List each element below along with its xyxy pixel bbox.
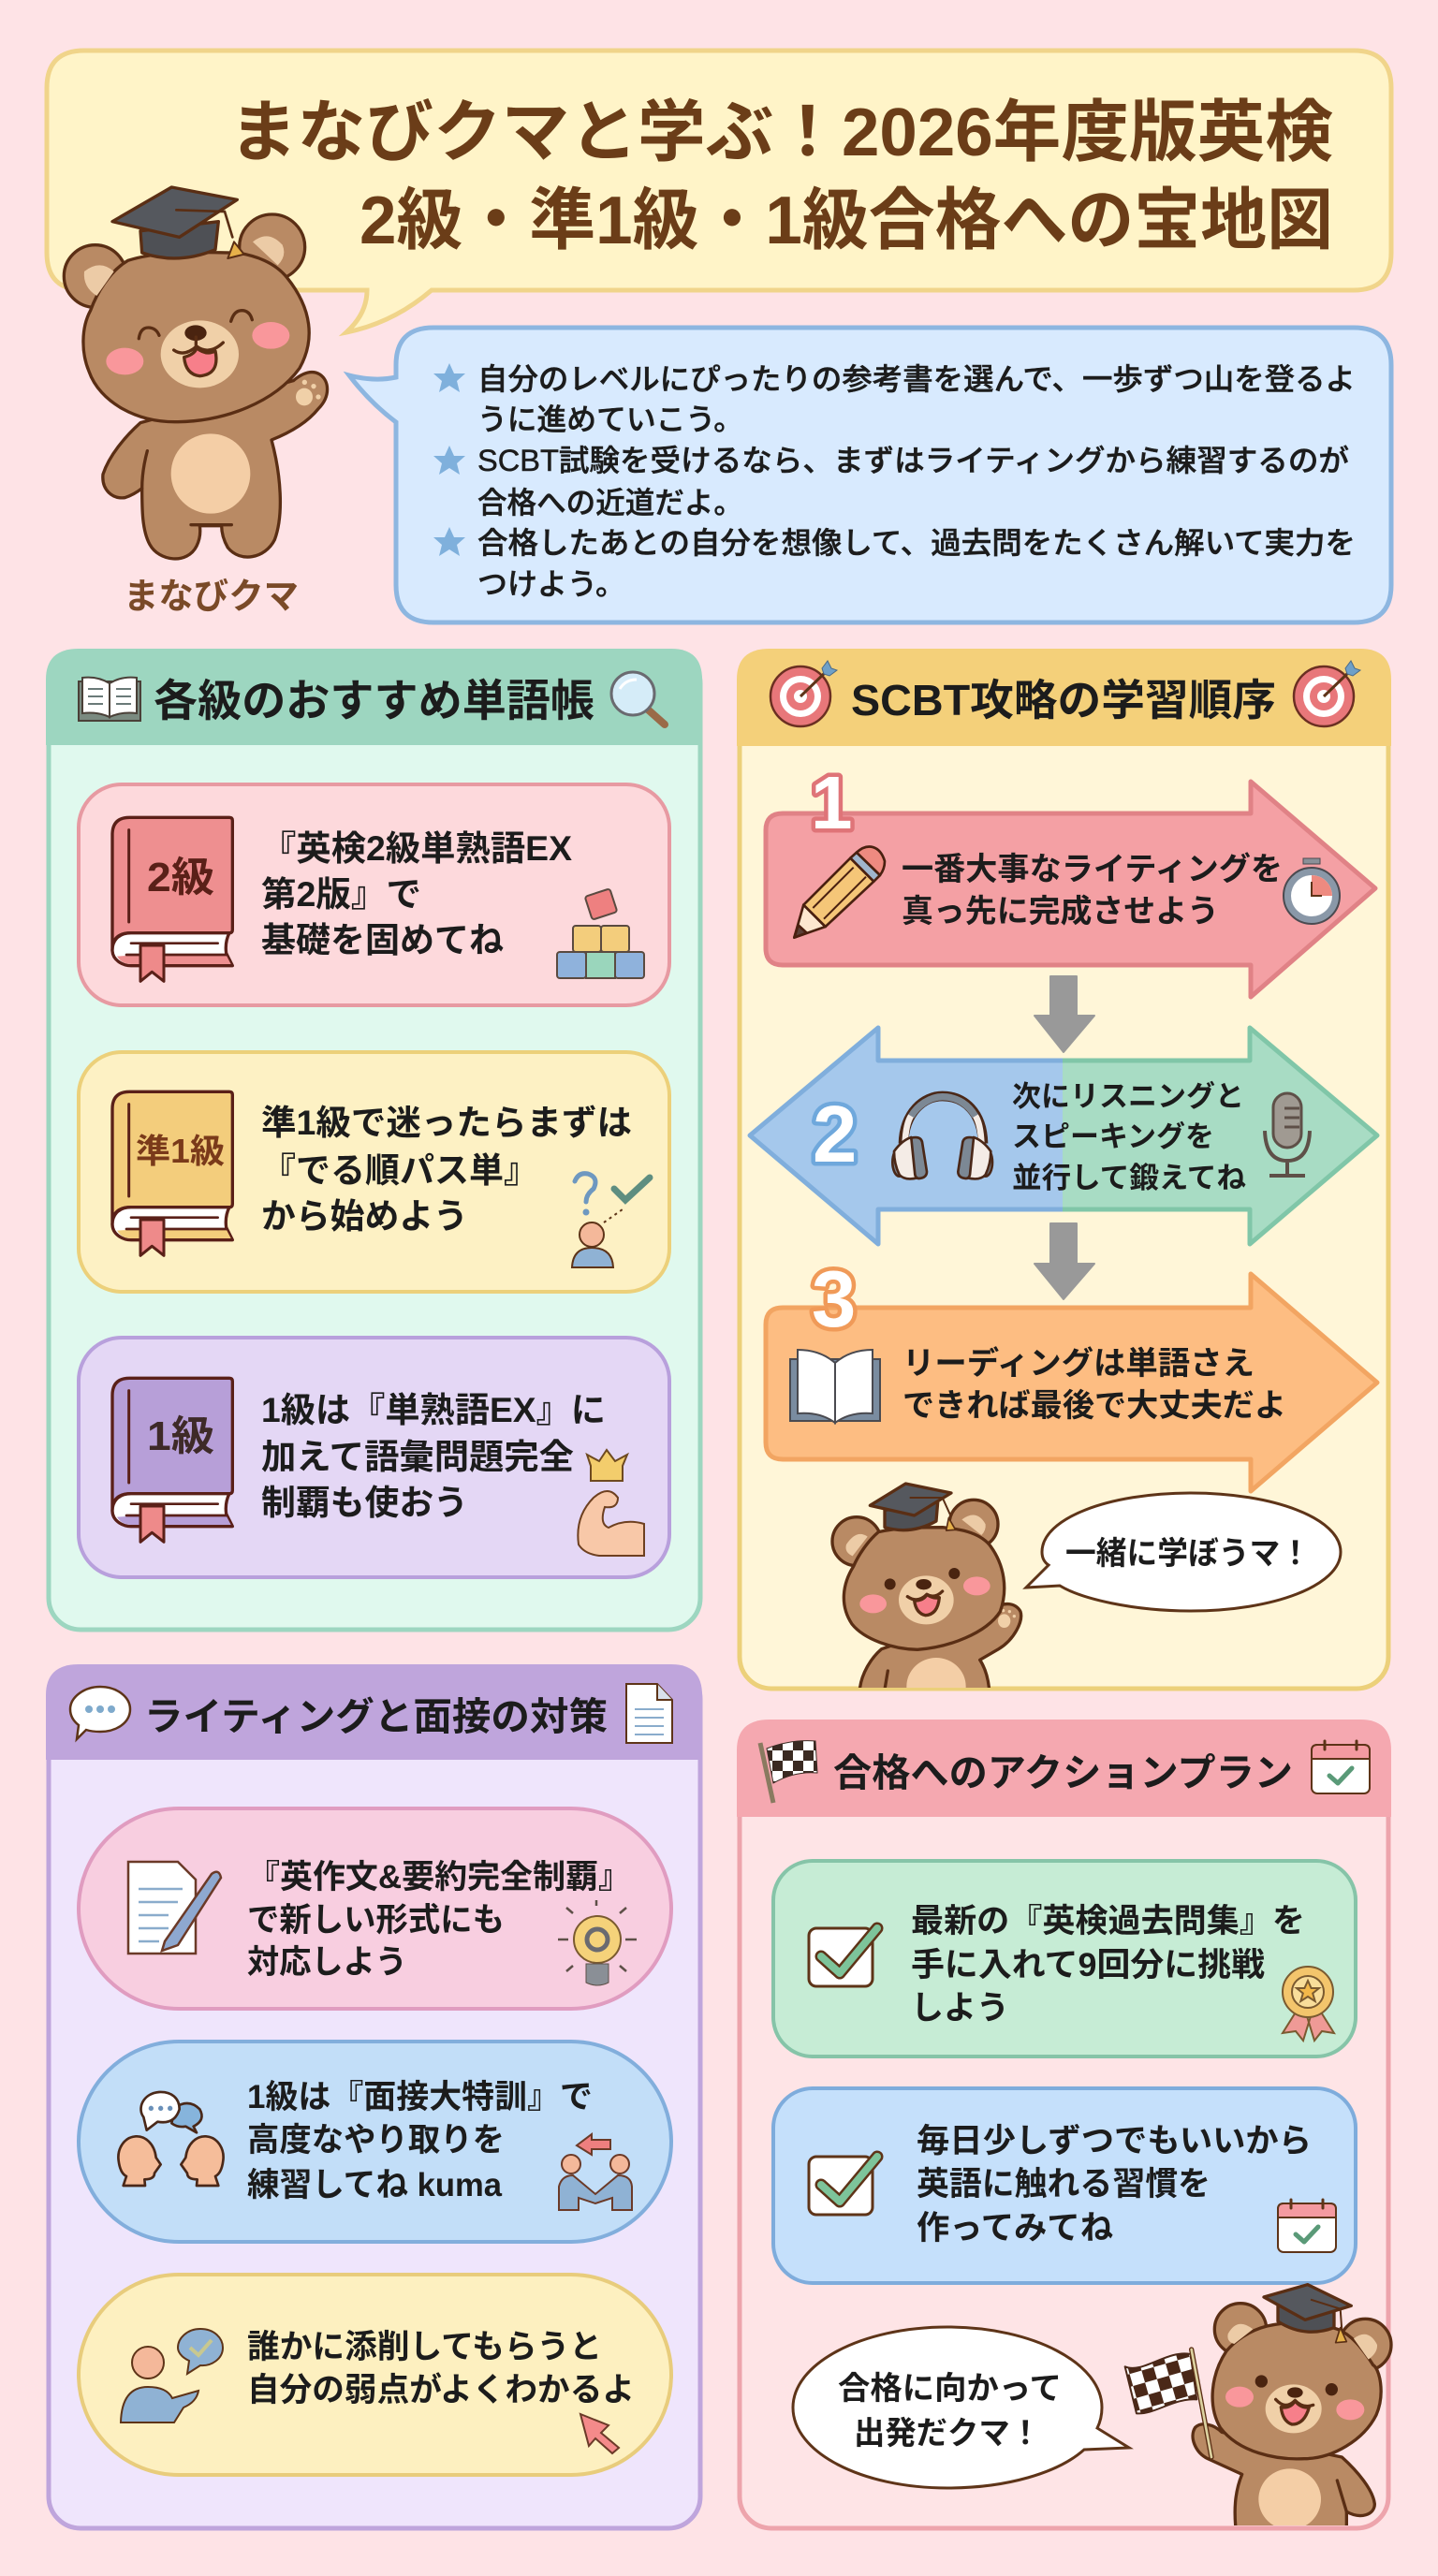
speech bubble: study together: 一緒に学ぼうマ！: [1065, 1536, 1311, 1572]
card text: 作ってみてね: [917, 2210, 1113, 2247]
icon: calendar: [1278, 2200, 1336, 2252]
step 3 text: リーディングは単語さえ: [902, 1345, 1255, 1382]
panel: vocabulary books: [46, 649, 702, 1630]
card text: [261, 1391, 606, 1522]
icon: book grade 1: [112, 1378, 232, 1542]
pill text: [247, 1859, 631, 1981]
step number 2: 2: [813, 1090, 857, 1179]
icon: document: [626, 1684, 672, 1743]
title text: まなびクマと学ぶ！2026年度版英検: [229, 95, 1333, 170]
card text: [261, 1104, 632, 1236]
icon: magnifier: [611, 672, 665, 724]
intro text: つけよう。: [477, 567, 625, 601]
icon: headphones: [892, 1096, 992, 1178]
pill text: [247, 2329, 635, 2408]
card text: しよう: [911, 1990, 1009, 2027]
icon: open book: [79, 678, 140, 721]
graduation cap: [112, 187, 244, 258]
pill text: 『英作文&要約完全制覇』: [247, 1859, 631, 1895]
checkered flag held: [1125, 2349, 1211, 2457]
card text: 『でる順パス単』: [261, 1151, 538, 1190]
step 1 text: [902, 852, 1283, 929]
card: grade 2: [79, 784, 669, 1005]
panel header: [46, 649, 702, 745]
icon: check box: [809, 2157, 877, 2215]
pill text: 自分の弱点がよくわかるよ: [247, 2372, 635, 2408]
panel: action plan: [737, 1720, 1391, 2530]
icon: cursor arrow: [580, 2414, 619, 2453]
card text: [261, 829, 572, 959]
card text: 加えて語彙問題完全: [261, 1438, 574, 1476]
card text: 基礎を固めてね: [261, 921, 504, 959]
card text: から始めよう: [261, 1197, 468, 1236]
pill text: 1級は『面接大特訓』で: [247, 2079, 593, 2115]
heading: SCBT攻略の学習順序: [851, 676, 1276, 724]
card text: 準1級で迷ったらまずは: [261, 1104, 632, 1142]
card: pre-grade 1: [79, 1052, 669, 1292]
card text: [911, 1903, 1305, 2027]
step 3 text: できれば最後で大丈夫だよ: [902, 1388, 1286, 1424]
pill text: 誰かに添削してもらうと: [247, 2329, 602, 2365]
pill text: で新しい形式にも: [247, 1902, 505, 1939]
card text: 制覇も使おう: [261, 1484, 468, 1522]
icon: checkered flag: [760, 1741, 817, 1803]
icon: chat bubble: [70, 1687, 130, 1739]
card text: 英語に触れる習慣を: [917, 2166, 1211, 2203]
pill: feedback: [79, 2275, 671, 2475]
book label: 2級: [147, 855, 214, 900]
book label: 準1級: [136, 1132, 225, 1170]
step 2 text: 並行して鍛えてね: [1012, 1162, 1246, 1194]
pill text: [247, 2079, 593, 2203]
step 2 text: 次にリスニングと: [1012, 1080, 1244, 1113]
pill text: 対応しよう: [247, 1944, 407, 1981]
icon: microphone: [1265, 1093, 1310, 1176]
card: past papers: [773, 1861, 1356, 2056]
intro speech panel: [349, 328, 1391, 622]
panel: writing and interview: [46, 1664, 702, 2528]
icon: target right: [1294, 661, 1360, 726]
icon: paper and pen: [128, 1862, 221, 1954]
icon: stopwatch: [1284, 858, 1340, 924]
step 1 text: 真っ先に完成させよう: [902, 894, 1219, 929]
mascot name: まなびクマ: [124, 578, 299, 617]
intro text: 合格への近道だよ。: [477, 486, 743, 520]
step number 3: 3: [812, 1255, 856, 1344]
card: daily habit: [773, 2088, 1356, 2283]
card text: [917, 2123, 1312, 2247]
pill: essay book: [79, 1808, 671, 2009]
icon: medal: [1283, 1967, 1334, 2041]
card text: 毎日少しずつでもいいから: [917, 2123, 1312, 2159]
card text: 1級は『単熟語EX』に: [261, 1391, 606, 1429]
panel: SCBT order: [46, 649, 1391, 2530]
step 1 text: 一番大事なライティングを: [902, 852, 1283, 887]
panel header: [737, 649, 1391, 746]
book label: 1級: [147, 1413, 214, 1459]
heading: ライティングと面接の対策: [144, 1695, 608, 1738]
pill text: 練習してね kuma: [247, 2167, 503, 2203]
panel header: [46, 1664, 702, 1760]
card text: 手に入れて9回分に挑戦: [911, 1947, 1265, 1983]
icon: pencil: [794, 847, 885, 938]
intro text: [477, 362, 1356, 601]
panel header: [737, 1720, 1391, 1817]
speech bubble: study together: [1026, 1493, 1341, 1611]
title line 2: 2級・準1級・1級合格への宝地図: [360, 183, 1333, 258]
icon: target left: [770, 661, 837, 726]
heading: 各級のおすすめ単語帳: [154, 676, 594, 725]
intro text: 自分のレベルにぴったりの参考書を選んで、一歩ずつ山を登るよ: [477, 362, 1356, 396]
intro text: 合格したあとの自分を想像して、過去問をたくさん解いて実力を: [477, 526, 1356, 560]
mascot bear main: [64, 187, 328, 559]
icon: question person: [572, 1174, 650, 1267]
icon: calendar: [1312, 1741, 1370, 1793]
icon: check box: [809, 1928, 877, 1986]
icon: two heads talking: [118, 2092, 224, 2186]
speech bubble: depart: 出発だクマ！: [854, 2416, 1041, 2452]
step 1 arrow: [766, 761, 1375, 997]
star bullets: [433, 363, 465, 556]
step number 1: 1: [811, 761, 852, 844]
intro text: うに進めていこう。: [477, 402, 743, 436]
icon: open book: [790, 1350, 880, 1423]
step 3 text: [902, 1345, 1286, 1424]
speech bubble: depart: [793, 2327, 1129, 2488]
icon: handshake: [559, 2134, 632, 2210]
step 3 arrow: [766, 1255, 1377, 1491]
icon: blocks: [557, 888, 644, 978]
icon: light bulb: [558, 1900, 637, 1985]
title speech bubble: [47, 51, 1391, 332]
flow arrow down: [1034, 1223, 1094, 1299]
pill: interview: [79, 2042, 671, 2242]
card: grade 1: [79, 1338, 669, 1577]
intro text: SCBT試験を受けるなら、まずはライティングから練習するのが: [477, 444, 1349, 477]
icon: book pre-1: [112, 1091, 232, 1255]
mascot bear with flag: [1125, 2285, 1391, 2530]
speech bubble: depart: 合格に向かって: [838, 2371, 1062, 2407]
heading: 合格へのアクションプラン: [833, 1751, 1293, 1794]
flow arrow down: [1034, 976, 1094, 1052]
icon: flexed arm: [578, 1491, 644, 1556]
card text: 第2版』で: [261, 875, 421, 914]
icon: crown: [587, 1450, 627, 1481]
step 2 arrow: [750, 1028, 1377, 1244]
card text: 『英検2級単熟語EX: [261, 829, 572, 868]
step 2 text: スピーキングを: [1012, 1120, 1214, 1153]
card text: 最新の『英検過去問集』を: [911, 1903, 1305, 1939]
icon: person with check bubble: [121, 2329, 223, 2422]
step 2 text: [1012, 1080, 1246, 1194]
mascot bear waving: [832, 1484, 1021, 1715]
pill text: 高度なやり取りを: [247, 2122, 505, 2159]
icon: book grade 2: [112, 817, 232, 981]
